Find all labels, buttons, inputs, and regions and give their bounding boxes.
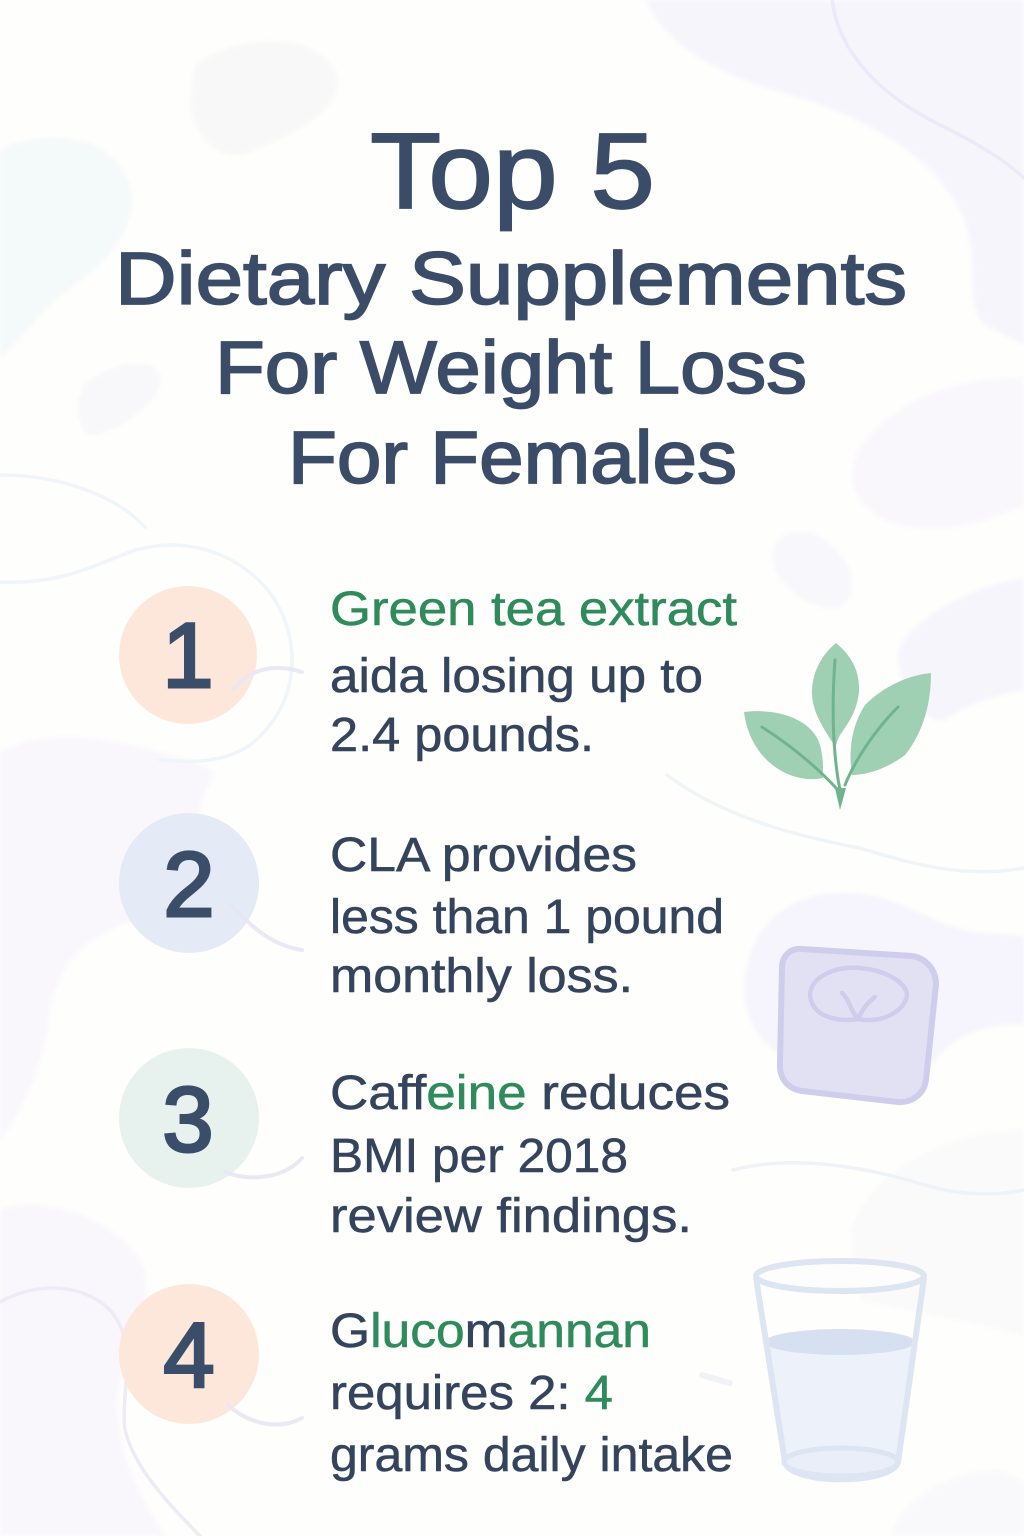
item 4 text: requires 2: 4 (330, 1367, 613, 1420)
item 3 text (330, 1067, 730, 1243)
icon: bathroom scale (780, 949, 936, 1102)
item 1 text: 2.4 pounds. (330, 709, 594, 762)
item 2 text: CLA provides (330, 829, 637, 882)
item 1 number badge: 1 (162, 605, 214, 707)
item 1 number badge (119, 586, 257, 724)
connector curves over badges (225, 668, 302, 1424)
item 4 text (330, 1305, 733, 1482)
item 4 text: grams daily intake (330, 1429, 733, 1482)
item 4 number badge: 4 (163, 1305, 215, 1407)
item 2 text (330, 829, 724, 1003)
title: Top 5 (370, 110, 655, 231)
item 4 text: Glucomannan (330, 1305, 651, 1358)
item 2 text: less than 1 pound (330, 891, 724, 944)
item 3 text: review findings. (330, 1190, 692, 1243)
title (115, 110, 907, 499)
item 2 number badge (119, 813, 259, 953)
title: For Females (288, 416, 737, 499)
item 1 text: Green tea extract (330, 583, 737, 636)
item 1 text (330, 583, 737, 762)
item 3 number badge: 3 (162, 1069, 214, 1171)
icon: green tea leaves (744, 643, 931, 810)
item 2 number badge: 2 (163, 834, 215, 936)
item 2 text: monthly loss. (330, 950, 633, 1003)
title: For Weight Loss (215, 326, 807, 409)
icon: glass of water (756, 1261, 924, 1479)
item 3 number badge (119, 1048, 259, 1188)
title: Dietary Supplements (115, 237, 907, 320)
item 3 text: BMI per 2018 (330, 1130, 628, 1183)
item 4 number badge (119, 1284, 259, 1424)
item 3 text: Caffeine reduces (330, 1067, 730, 1120)
item 1 text: aida losing up to (330, 650, 703, 703)
